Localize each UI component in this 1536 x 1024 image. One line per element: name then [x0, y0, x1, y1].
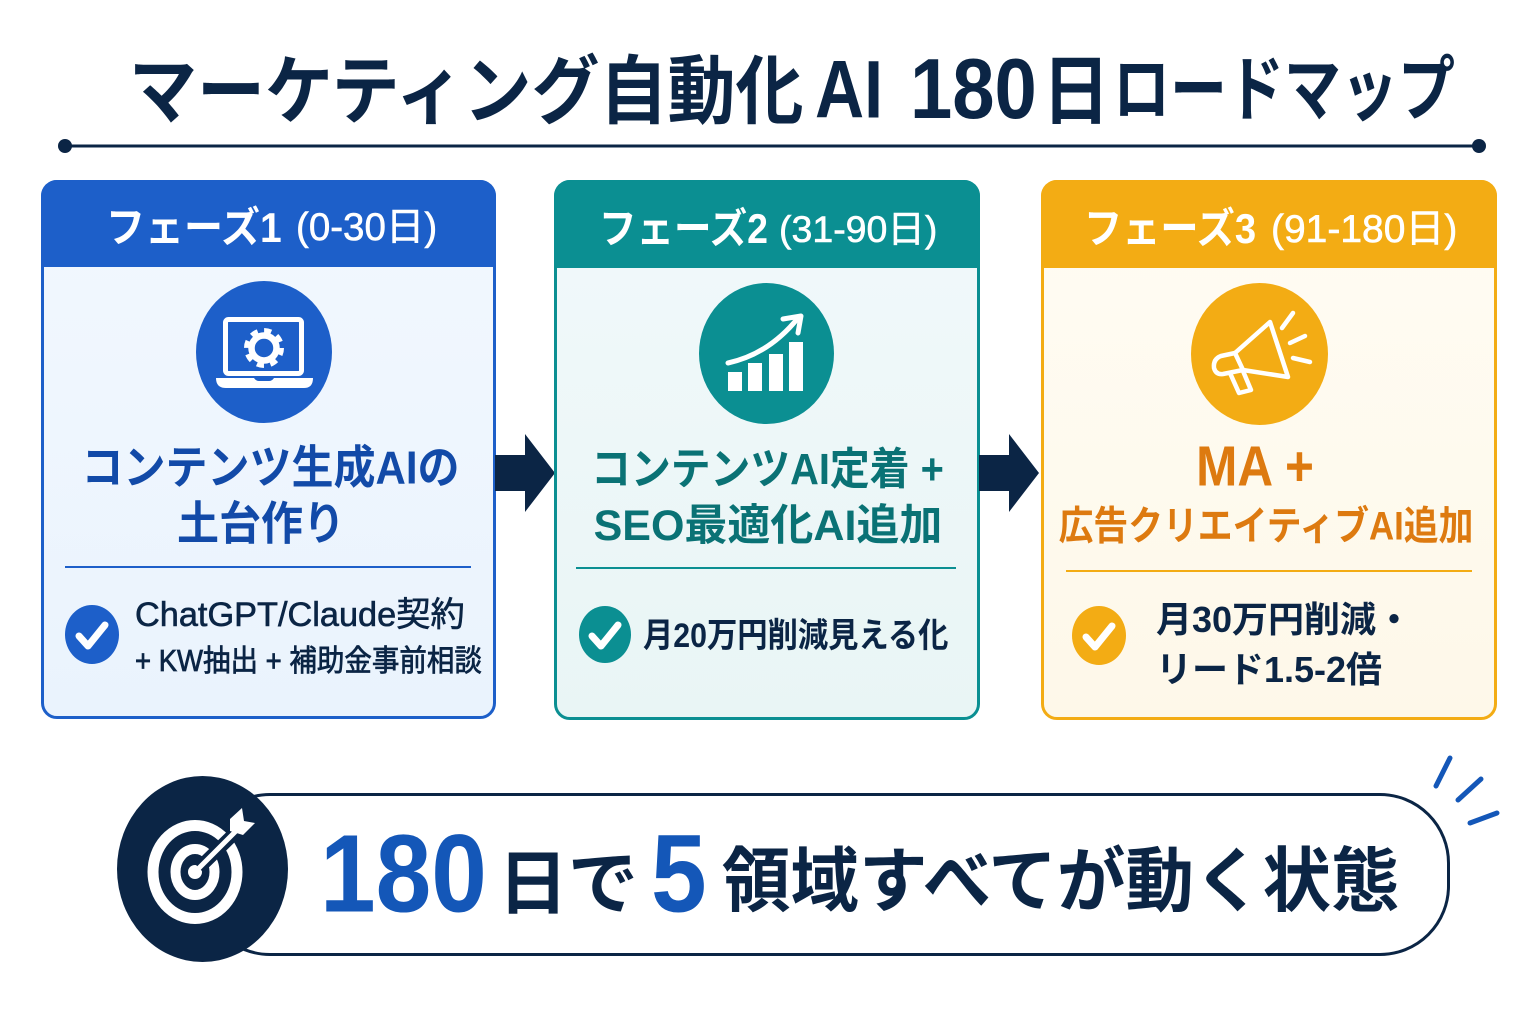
title line 2: SEO最適化AI追加 [594, 502, 942, 550]
title: マーケティング自動化 [129, 50, 804, 134]
days: 日で [498, 845, 638, 923]
phase 3 dates: (91-180日) [1271, 208, 1457, 251]
goal text [320, 812, 1399, 936]
panel: phase 2 [554, 180, 980, 720]
phase 3 header [1041, 180, 1497, 268]
phase 2 outcome: 月20万円削減見える化 [643, 618, 948, 655]
icon: rising chart [699, 283, 834, 424]
title: 180 [910, 42, 1037, 137]
icon: check [65, 605, 119, 664]
phase 1 dates: (0-30日) [296, 206, 437, 249]
title line 2: 土台作り [177, 498, 345, 549]
5: 5 [651, 812, 707, 936]
phase 3 title [1059, 435, 1473, 549]
phase 3 outcome: リード1.5-2倍 [1156, 649, 1382, 690]
ad creative AI: 広告クリエイティブAI追加 [1059, 504, 1473, 549]
phase 3 outcome [1156, 599, 1412, 690]
outcome line 2: + KW抽出 + 補助金事前相談 [135, 643, 482, 678]
panel: phase 1 [41, 180, 496, 719]
title line 1: コンテンツ生成AIの [81, 442, 460, 493]
phase 1 card body [41, 180, 496, 719]
phase 1 title [81, 442, 460, 549]
title: 日 [1042, 49, 1110, 135]
phase 2 title [591, 446, 944, 550]
title: AI [815, 44, 883, 136]
burst accent [1434, 756, 1500, 826]
title rule [58, 139, 1486, 153]
phase 1 outcome [135, 596, 482, 678]
phase 3 card body [1041, 180, 1497, 720]
icon: check [579, 606, 631, 663]
phase 1 header [41, 180, 496, 267]
icon: megaphone [1191, 283, 1328, 425]
icon: check [1072, 606, 1126, 665]
phase 3 outcome: 月30万円削減・ [1156, 599, 1412, 640]
statement: 領域すべてが動く状態 [722, 842, 1399, 921]
phase 3 heading: フェーズ3 [1084, 206, 1256, 253]
arrow: phase 1 to 2 [495, 434, 554, 512]
phase 1 heading: フェーズ1 [106, 205, 282, 252]
panel: phase 3 [1041, 180, 1497, 720]
MA plus: MA + [1196, 435, 1314, 498]
phase 2 card body [554, 180, 980, 720]
phase 2 heading: フェーズ2 [599, 206, 768, 252]
title [129, 42, 1455, 137]
arrow: phase 2 to 3 [979, 434, 1039, 512]
phase 2 header [554, 180, 980, 268]
outcome line 1: ChatGPT/Claude契約 [135, 596, 465, 634]
title line 1: コンテンツAI定着 + [591, 446, 944, 494]
icon: laptop with gear [196, 281, 332, 423]
icon: target badge [117, 776, 288, 962]
goal pill [200, 793, 1450, 956]
180: 180 [320, 812, 487, 936]
panel: goal banner [117, 756, 1500, 962]
title: ロードマップ [1113, 51, 1455, 131]
phase 2 dates: (31-90日) [779, 208, 937, 250]
